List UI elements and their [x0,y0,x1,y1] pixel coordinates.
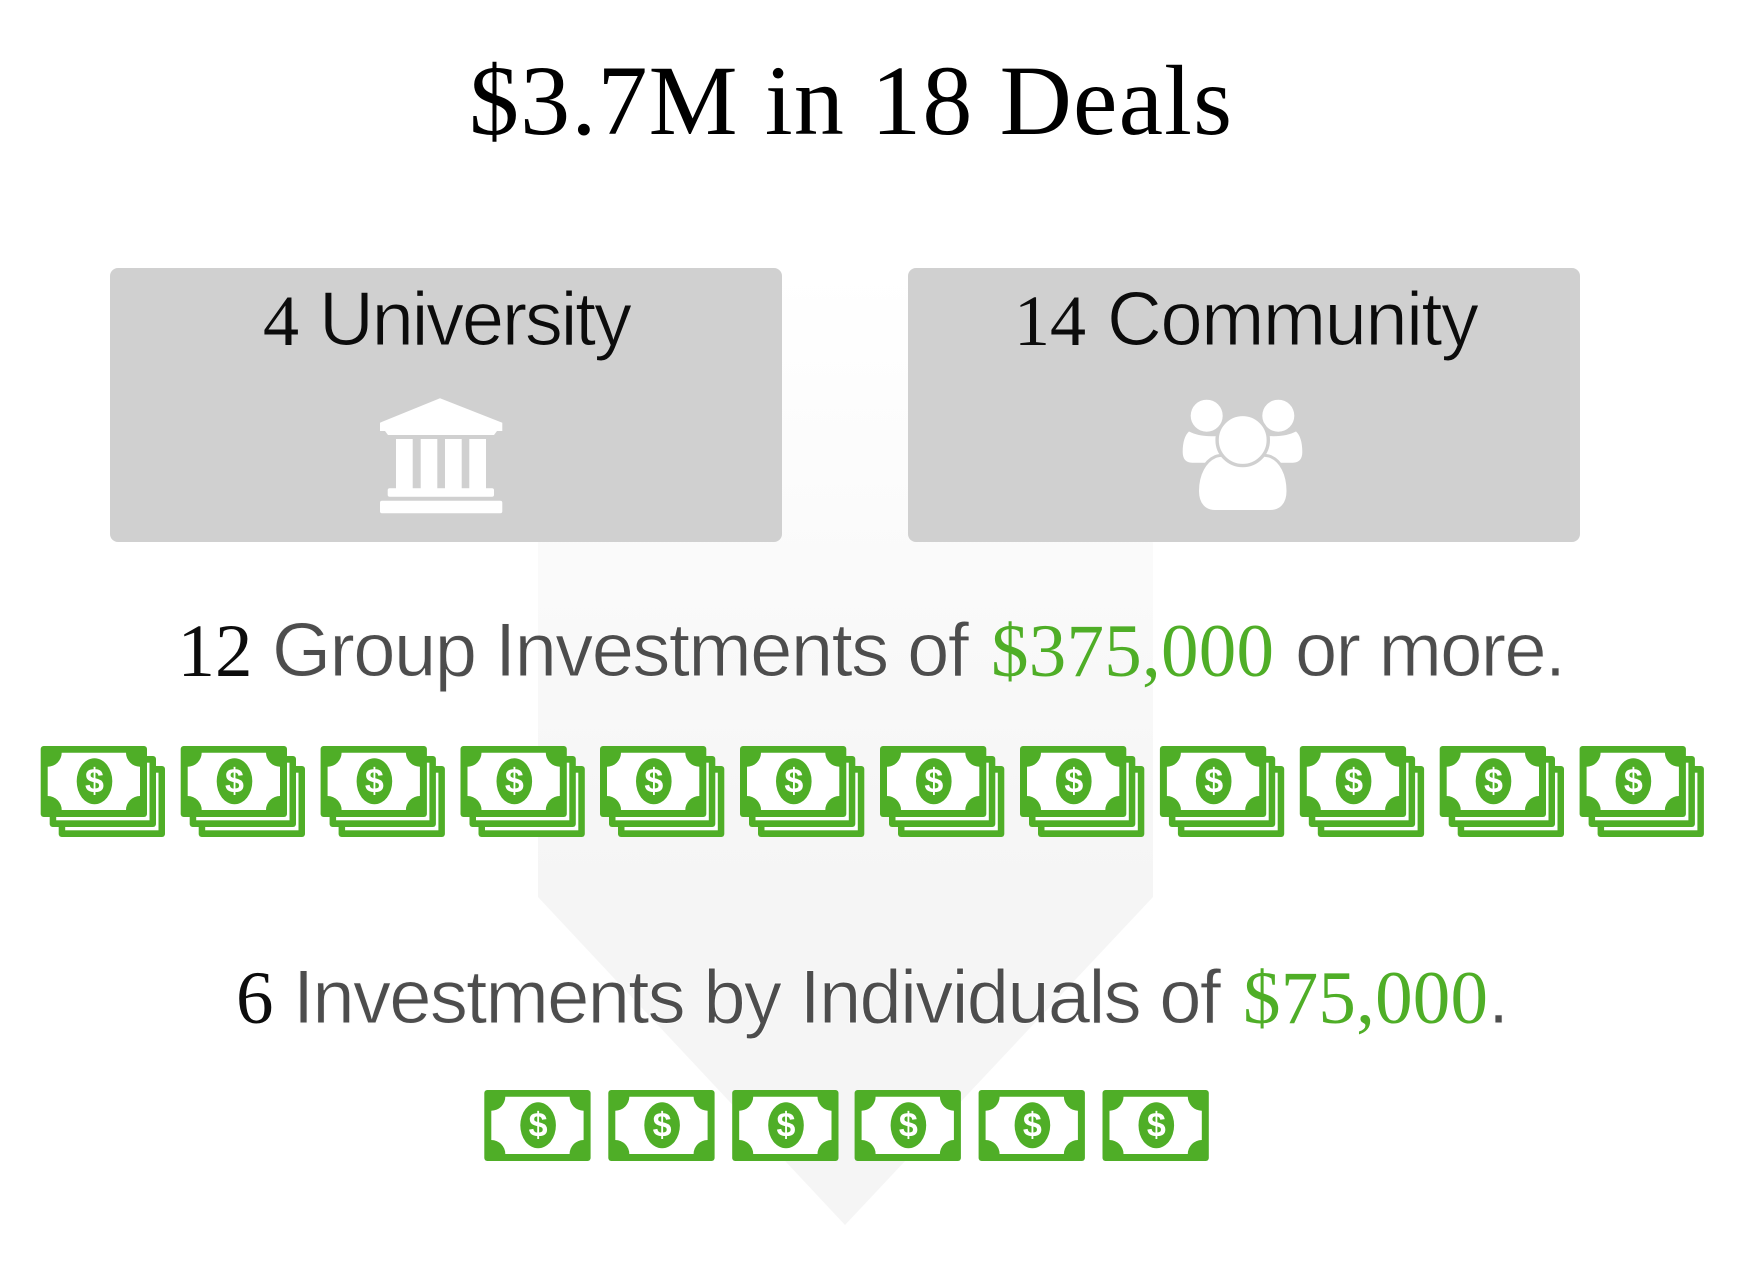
icon: bill 3: $ [777,1106,796,1144]
icon: group of people [1183,400,1302,512]
icon: money stack 12 [1580,746,1704,837]
row: 12 group investment money stacks [41,746,1704,837]
icon: money stack 8: $ [1064,762,1083,800]
icon: money stack 9: $ [1204,762,1223,800]
icon: money stack 6: $ [784,762,803,800]
icon: money stack 2 [181,746,305,837]
panel: community [908,268,1580,542]
panel: university [110,268,782,542]
icon: money stack 1: $ [85,762,104,800]
icon: money stack 12: $ [1624,762,1643,800]
icon: money stack 10: $ [1344,762,1363,800]
text: group investments: 12 [178,610,252,693]
row: 6 individual investment bills [484,1090,1209,1161]
icon: money stack 3: $ [365,762,384,800]
icon: money stack 7 [880,746,1004,837]
icon: bill 4: $ [899,1106,918,1144]
icon: money stack 3 [321,746,445,837]
text: group investments: or more. [1295,608,1566,693]
icon: bill 1: $ [529,1106,548,1144]
text: individual investments: $75,000 [1243,957,1488,1040]
background arrow [538,250,1153,1225]
icon: money stack 5 [600,746,724,837]
icon: bill 5: $ [1023,1106,1042,1144]
icon: money stack 5: $ [644,762,663,800]
text: individual investments: Investments by Individuals of [293,955,1222,1040]
heading: 14 Community: 14 [1014,281,1086,361]
heading: 14 Community: Community [1107,277,1479,362]
icon: money stack 2: $ [225,762,244,800]
heading: 4 University: 4 [263,281,299,361]
heading: 4 University: University [319,277,632,362]
icon: bill 4 [855,1090,961,1161]
text: group investments [178,608,1566,693]
icon: money stack 11 [1440,746,1564,837]
icon: bill 1 [484,1090,591,1161]
icon: money stack 1 [41,746,165,837]
icon: money stack 6 [740,746,864,837]
text: group investments: Group Investments of [272,608,970,693]
text: group investments: $375,000 [991,610,1274,693]
text: individual investments: . [1488,955,1509,1040]
text: individual investments: 6 [236,957,274,1040]
icon: bill 2: $ [653,1106,672,1144]
icon: university building [380,398,502,513]
icon: money stack 10 [1300,746,1424,837]
icon: bill 6: $ [1147,1106,1166,1144]
icon: bill 2 [608,1090,715,1161]
icon: money stack 4 [460,746,585,837]
icon: money stack 4: $ [505,762,524,800]
icon: money stack 9 [1160,746,1284,837]
title: $3.7M in 18 Deals [469,45,1232,156]
icon: money stack 8 [1020,746,1144,837]
icon: bill 6 [1102,1090,1209,1161]
icon: bill 5 [979,1090,1085,1161]
icon: money stack 11: $ [1484,762,1503,800]
icon: bill 3 [732,1090,838,1161]
icon: money stack 7: $ [924,762,943,800]
